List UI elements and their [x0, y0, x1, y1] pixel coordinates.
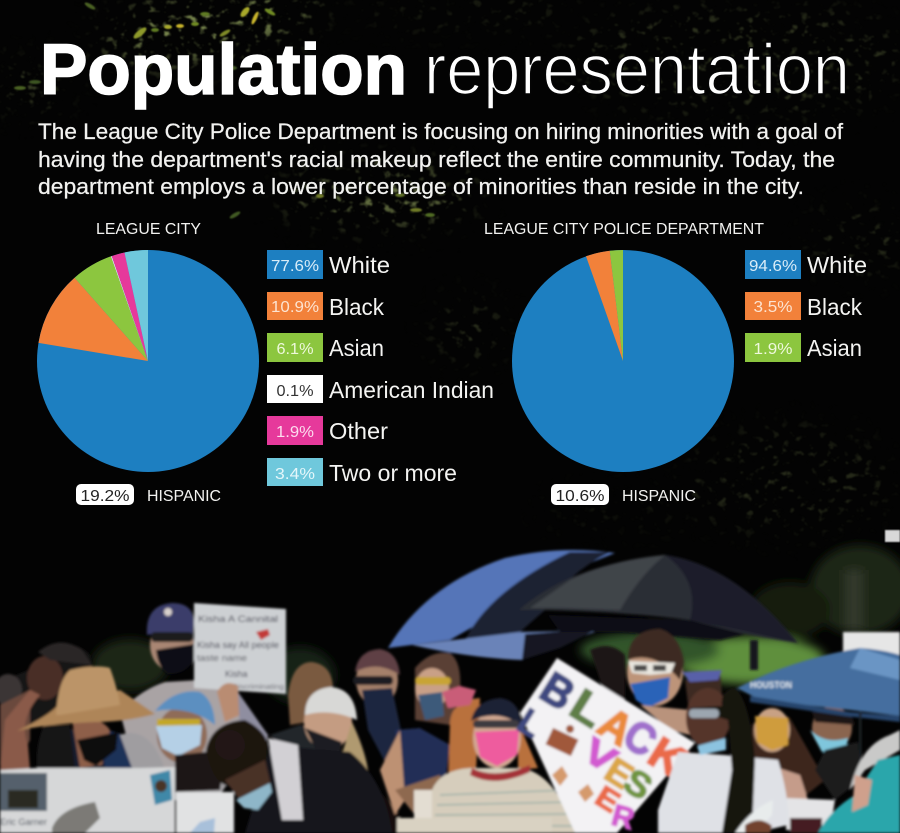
- black lives matter sign: [511, 658, 695, 833]
- title: Population: [40, 31, 407, 110]
- legend row: Other: Other: [329, 418, 388, 444]
- legend row: Black: 3.5%: [754, 299, 792, 316]
- title: representation: [424, 31, 850, 110]
- black lives matter sign: E: [598, 749, 641, 797]
- legend row: Other: [267, 416, 388, 445]
- legend row: Black: Black: [329, 294, 384, 320]
- blue umbrella, right: [737, 648, 900, 802]
- legend row: Other: 1.9%: [276, 424, 314, 441]
- handwritten sign: Kisha say All people: [197, 640, 279, 650]
- legend row: White: [267, 250, 390, 279]
- hand holding sign: [217, 683, 240, 722]
- legend row: Asian: Asian: [807, 335, 862, 361]
- black lives matter sign: K: [640, 728, 694, 787]
- blue umbrella, right: HOUSTON: [750, 680, 792, 690]
- handwritten sign: Kisha: [225, 669, 248, 679]
- pie chart: police department: [512, 250, 734, 472]
- legend row: Black: 10.9%: [271, 299, 319, 316]
- Hispanic callout: police department: [551, 484, 696, 505]
- woman with floral mask and person with blue mask: [752, 706, 860, 833]
- handwritten sign: taste name: [197, 653, 247, 663]
- legend row: Two or more: 3.4%: [275, 466, 315, 483]
- handwritten sign: Discriminating: [232, 684, 284, 691]
- person in teal, right edge: [818, 730, 900, 833]
- blue and navy umbrella: [388, 550, 615, 660]
- black lives matter sign: C: [615, 710, 665, 767]
- black lives matter sign: A: [590, 698, 642, 756]
- legend row: Black: [745, 292, 862, 320]
- legend row: Asian: [745, 333, 862, 362]
- black lives matter sign: E: [589, 780, 625, 820]
- woman in white t-shirt with long braids: [658, 688, 788, 833]
- Hispanic callout: police department: 10.6%: [556, 488, 604, 505]
- background trees behind crowd: [92, 545, 900, 703]
- Hispanic callout: League City: HISPANIC: [147, 488, 221, 505]
- black lives matter sign: B: [532, 663, 583, 720]
- legend row: White: [745, 250, 867, 279]
- legend row: Asian: 6.1%: [276, 341, 314, 358]
- legend row: Asian: 1.9%: [754, 341, 792, 358]
- kneeling man with towel: [206, 720, 392, 833]
- woman with pink mask: [397, 686, 575, 833]
- panel: League City Police Department: [484, 221, 867, 505]
- legend row: White: White: [807, 252, 867, 278]
- protest sign behind, right edge: [843, 632, 900, 657]
- legend row: Two or more: [267, 458, 457, 486]
- handwritten sign: [194, 603, 286, 694]
- legend row: White: White: [329, 252, 390, 278]
- legend row: Two or more: Two or more: [329, 460, 457, 486]
- Hispanic callout: League City: 19.2%: [80, 488, 130, 505]
- title: [40, 31, 850, 110]
- legend: police department: [745, 250, 867, 362]
- black lives matter sign: L: [511, 700, 550, 746]
- legend row: Asian: Asian: [329, 335, 384, 361]
- crowd, center group: [270, 649, 460, 833]
- legend row: American Indian: 0.1%: [276, 383, 314, 400]
- intro text block: [38, 119, 844, 199]
- pie chart: League City: [37, 250, 259, 472]
- handwritten sign: Kisha A Cannital: [198, 614, 278, 625]
- legend row: White: 94.6%: [749, 258, 797, 275]
- heading: League City Police Department: LEAGUE CITY POLICE DEPARTMENT: [484, 221, 764, 238]
- legend row: Black: [267, 292, 384, 320]
- heading: League City: LEAGUE CITY: [96, 221, 201, 238]
- black lives matter sign: V: [576, 729, 625, 781]
- intro text block: The League City Police Department is focusing on hiring minorities with a goal of: [38, 119, 844, 144]
- intro text block: having the department's racial makeup reflect the entire community. Today, the: [38, 147, 835, 172]
- foliage highlights: [14, 1, 435, 220]
- black umbrella: [519, 555, 798, 670]
- panel: League City: [37, 221, 494, 505]
- Hispanic callout: League City: [76, 484, 221, 505]
- legend row: American Indian: American Indian: [329, 377, 494, 403]
- black lives matter sign: S: [617, 760, 660, 808]
- woman with straw hat: [40, 728, 141, 775]
- legend row: Asian: [267, 333, 384, 362]
- poster, bottom left: Eric Garner: [0, 817, 47, 828]
- intro text block: department employs a lower percentage of minorities than reside in the city.: [38, 174, 804, 199]
- poster, bottom left: [0, 767, 234, 833]
- person with blue cap and patterned mask: [120, 733, 230, 810]
- legend row: Black: Black: [807, 294, 862, 320]
- crowd, left group: [0, 603, 268, 790]
- legend row: American Indian: [267, 375, 494, 403]
- legend: League City: [267, 250, 494, 486]
- legend row: White: 77.6%: [271, 258, 319, 275]
- man with white sunglasses: [590, 629, 722, 735]
- Hispanic callout: police department: HISPANIC: [622, 488, 696, 505]
- black lives matter sign: L: [562, 680, 613, 737]
